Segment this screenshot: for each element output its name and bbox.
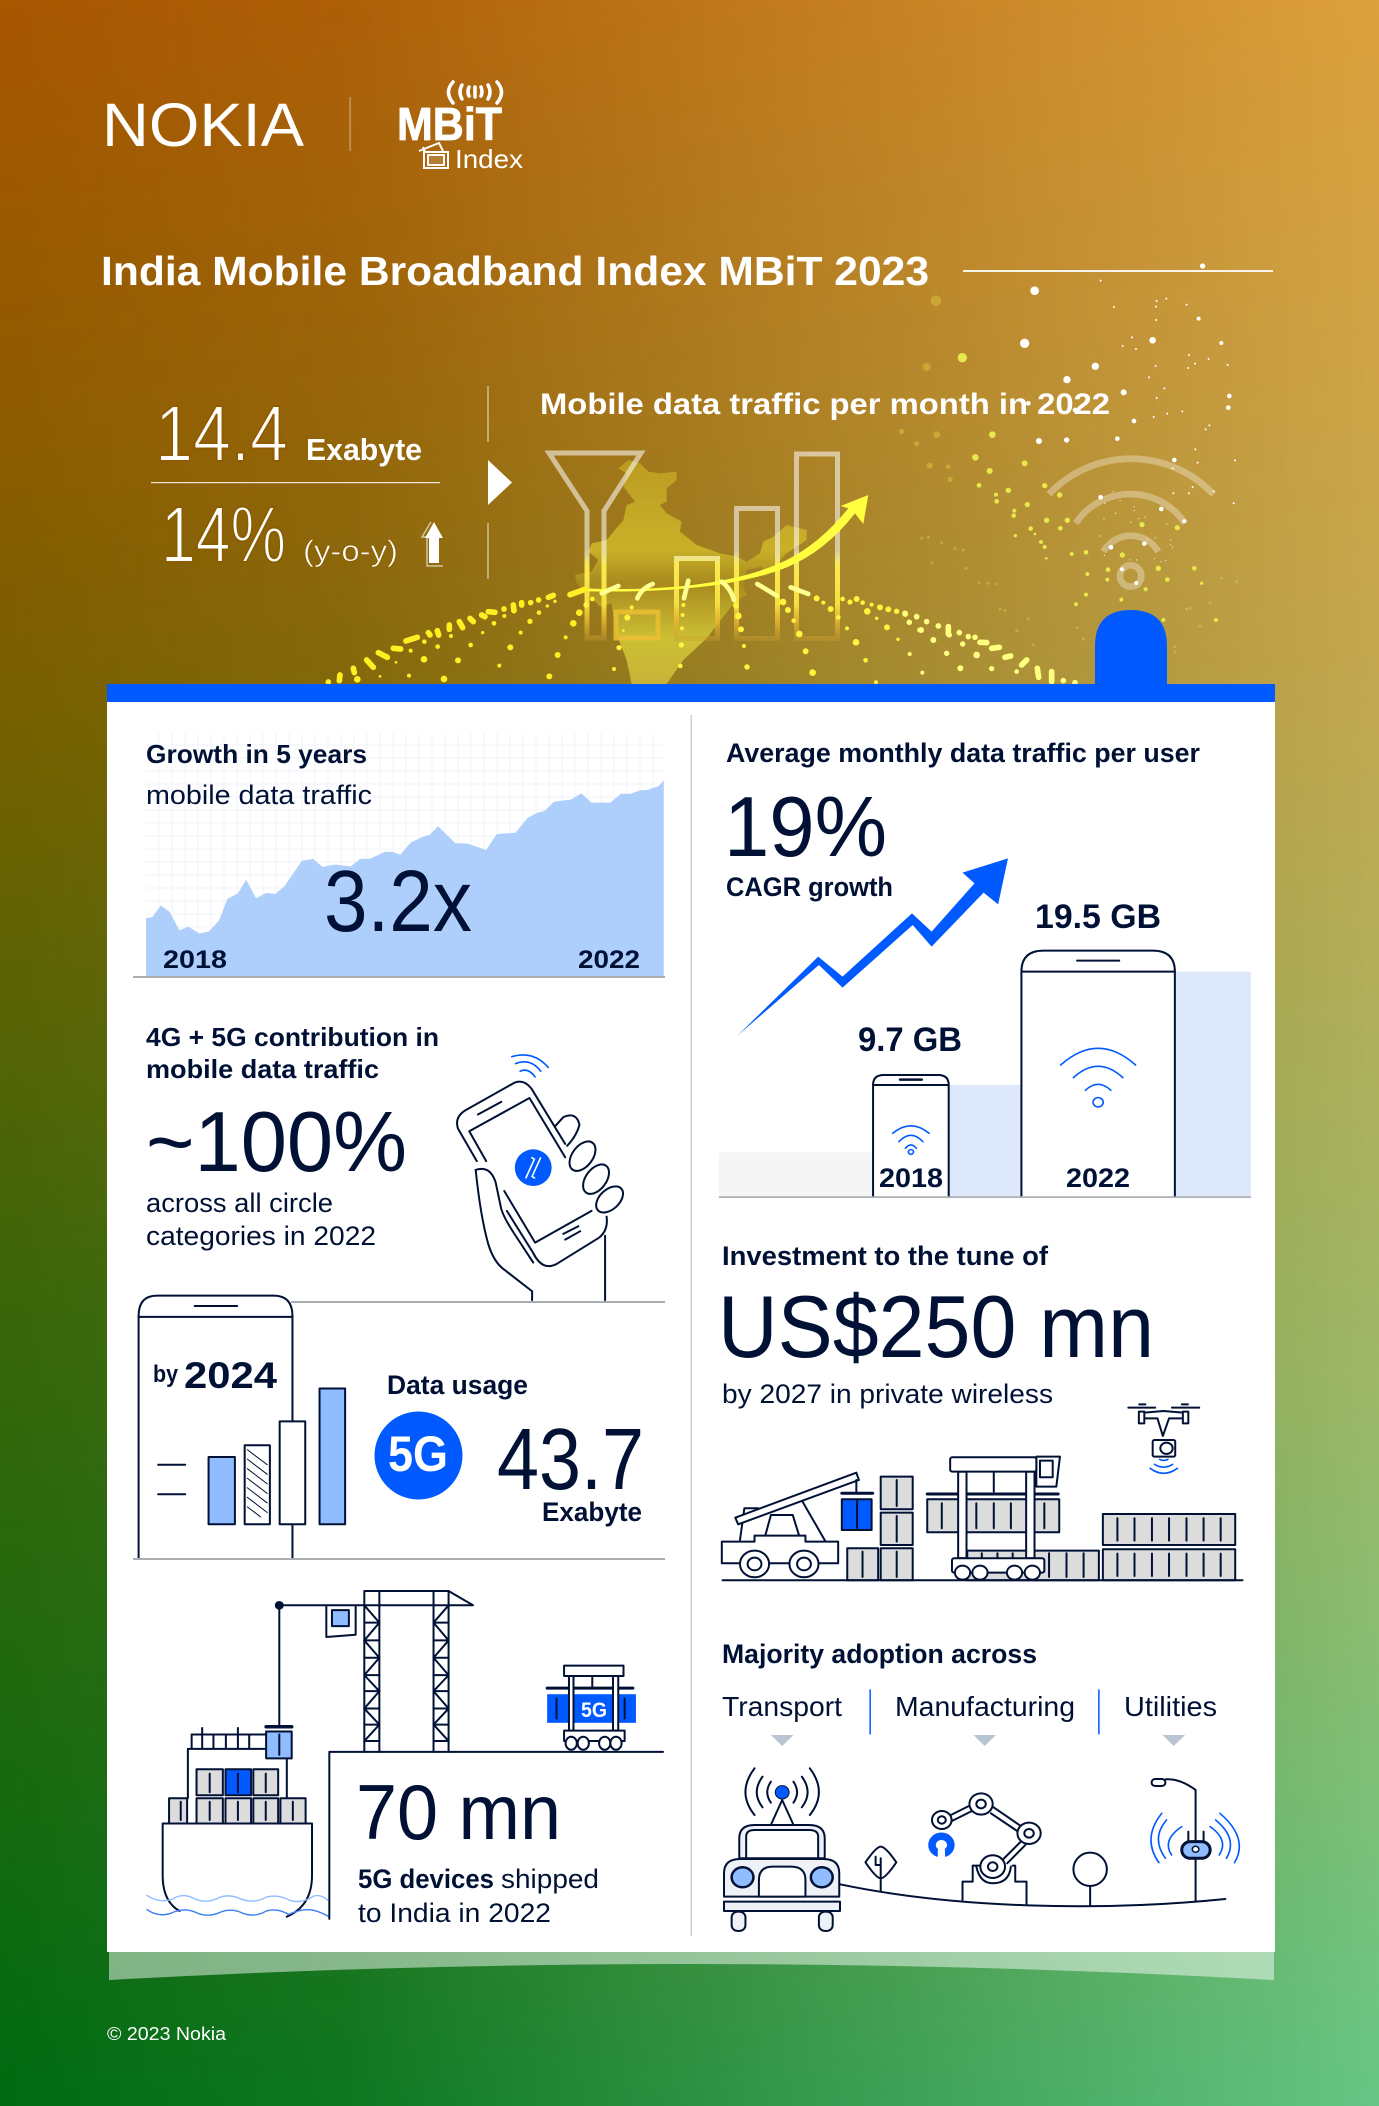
- section rule lower: [133, 1558, 665, 1560]
- heading: mobile data traffic: Mobile data traffic per month in 2022: [540, 388, 1110, 421]
- train 5G label: 5G: [581, 1699, 607, 1722]
- data exchange badge: [515, 1149, 552, 1186]
- axis labels: [163, 946, 640, 974]
- caption: [146, 1188, 376, 1251]
- hero illustration: [328, 453, 1213, 684]
- 5G badge: 5G: [388, 1426, 448, 1482]
- big number: 19%: [724, 780, 887, 875]
- heading: Data usage: [387, 1370, 528, 1400]
- particle field: [899, 263, 1237, 652]
- section rule upper: [291, 1301, 665, 1303]
- big number: US$250 mn: [718, 1277, 1154, 1376]
- panel: growth in 5 years: [133, 733, 665, 978]
- illustration: port crane, ship and train: [146, 1591, 663, 1919]
- panel: investment: [718, 1241, 1242, 1580]
- by 2024: by: [153, 1361, 179, 1388]
- smart lamp with sensor: [1151, 1779, 1239, 1902]
- subheading: mobile data traffic: [146, 780, 372, 810]
- caption: to India in 2022: [358, 1898, 551, 1928]
- growth arrow: [737, 858, 1008, 1036]
- stat: 14% y-o-y: (y-o-y): [303, 535, 398, 568]
- ship: [146, 1727, 329, 1917]
- ground line: [840, 1884, 1225, 1906]
- logo signal arcs: [448, 82, 502, 103]
- left dots: [328, 589, 585, 683]
- tree round: [1073, 1853, 1107, 1906]
- heading: 4G + 5G contribution in: [146, 1022, 439, 1052]
- baseline: [133, 976, 665, 978]
- value labels: 19.5 GB: [1035, 898, 1161, 936]
- globe dots: [328, 581, 1075, 684]
- stat: 14.4 Exabyte: [155, 389, 422, 478]
- panel: 5G devices shipped: [146, 1591, 663, 1928]
- illustration: private wireless port: [722, 1404, 1242, 1580]
- panel: average monthly data traffic: [719, 738, 1251, 1198]
- centre dots: [583, 581, 922, 684]
- stat rule: [151, 482, 440, 483]
- sector labels: [722, 1691, 1217, 1722]
- quay: [329, 1752, 663, 1919]
- logo: MBiT Index: [397, 82, 523, 174]
- icon: up arrow: [422, 522, 443, 566]
- by 2024: 2024: [184, 1355, 277, 1396]
- wifi icon: [1049, 459, 1213, 587]
- blue dome: [1095, 610, 1167, 690]
- axis labels: 2022: [578, 946, 640, 974]
- panel: majority adoption: [722, 1639, 1239, 1931]
- phone 2018: [873, 1075, 949, 1197]
- container stack: [847, 1477, 913, 1580]
- drone: [1128, 1404, 1199, 1473]
- logo: Nokia: NOKIA: [102, 91, 304, 159]
- stat: 14.4 Exabyte: Exabyte: [306, 432, 422, 467]
- icon: hand holding phone: [457, 1055, 628, 1300]
- caption: [358, 1864, 599, 1928]
- right dots: [905, 613, 1075, 683]
- logo: MBiT Index: Index: [455, 144, 523, 174]
- phone with bars: [139, 1296, 345, 1558]
- rising bars: [616, 454, 838, 638]
- area chart: [146, 780, 664, 976]
- heading: [146, 1022, 439, 1084]
- column divider: [690, 715, 692, 1936]
- divider with chevron: [488, 386, 512, 579]
- chart grid: [146, 733, 664, 976]
- phone 2022: [1021, 951, 1175, 1197]
- logo: MBiT Index: MBiT: [397, 98, 502, 150]
- title rule: [963, 270, 1273, 272]
- 5G badge: [374, 1412, 462, 1500]
- title: India Mobile Broadband Index MBiT 2023: [101, 248, 929, 294]
- year labels: [879, 1163, 1130, 1193]
- by 2024: [153, 1355, 277, 1396]
- heading: Majority adoption across: [722, 1639, 1037, 1669]
- big number: Exabyte: [542, 1497, 642, 1527]
- sector separators: [870, 1689, 1099, 1734]
- reach stacker: [722, 1473, 873, 1577]
- crane: [275, 1591, 473, 1752]
- sector labels: Transport: [722, 1691, 842, 1722]
- India map: [575, 460, 807, 684]
- background blocks: [719, 972, 1251, 1197]
- car with antenna: [724, 1768, 840, 1931]
- year labels: 2018: [879, 1163, 943, 1193]
- heading: Average monthly data traffic per user: [726, 738, 1200, 768]
- phones chart: [719, 858, 1251, 1198]
- funnel antenna: [549, 453, 641, 638]
- logo index icon: [419, 143, 448, 168]
- caption: shipped: [501, 1864, 599, 1894]
- caption: 5G devices: [358, 1864, 494, 1894]
- gantry and containers: [927, 1457, 1099, 1580]
- caption: categories in 2022: [146, 1221, 376, 1251]
- heading: Growth in 5 years: [146, 739, 367, 769]
- blue top band: [107, 684, 1275, 702]
- big number: 43.7: [497, 1411, 644, 1508]
- illustration: sectors: [724, 1689, 1239, 1931]
- logo divider: [350, 97, 351, 151]
- left stats block: [151, 389, 443, 579]
- heading: mobile data traffic: [146, 1054, 379, 1084]
- sector labels: Manufacturing: [895, 1691, 1075, 1722]
- value labels: [858, 898, 1161, 1059]
- caption: by 2027 in private wireless: [722, 1379, 1053, 1409]
- sector labels: Utilities: [1124, 1691, 1217, 1722]
- value labels: 9.7 GB: [858, 1021, 962, 1059]
- year labels: 2022: [1066, 1163, 1130, 1193]
- right container stack: [1103, 1514, 1235, 1580]
- robot arm: [932, 1793, 1041, 1904]
- white card: [107, 700, 1275, 1952]
- caption: CAGR growth: [726, 872, 893, 902]
- stat: 14% y-o-y: [161, 490, 398, 579]
- panel: 4G + 5G contribution: [146, 1022, 628, 1300]
- heading: Investment to the tune of: [722, 1241, 1049, 1271]
- pointer triangles: [771, 1735, 1185, 1746]
- caption: across all circle: [146, 1188, 333, 1218]
- axis labels: 2018: [163, 946, 227, 974]
- lower lip of card: [109, 1952, 1274, 1980]
- train: [547, 1666, 636, 1750]
- growth arrow: [588, 495, 868, 592]
- tree: [865, 1847, 896, 1892]
- stat: 14.4 Exabyte: 14.4: [155, 389, 288, 478]
- stat: 14% y-o-y: 14%: [161, 490, 286, 579]
- panel: data usage by 2024: [139, 1296, 644, 1558]
- big number: 70 mn: [356, 1768, 561, 1856]
- big number: 3.2x: [324, 853, 472, 950]
- copyright: © 2023 Nokia: [107, 2024, 227, 2044]
- big number: ~100%: [146, 1095, 407, 1190]
